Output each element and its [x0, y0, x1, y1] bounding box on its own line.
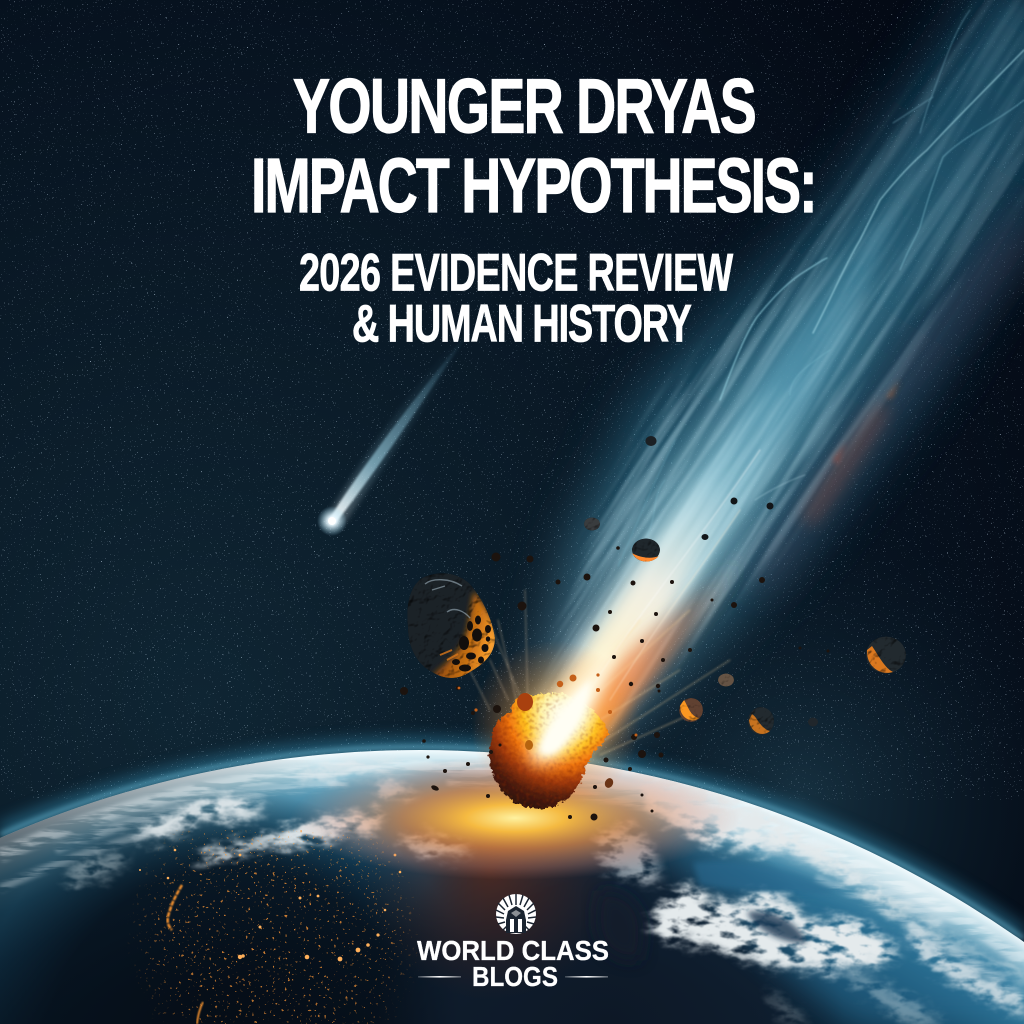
earth: atmosphere streaks — [0, 766, 1024, 999]
earth — [0, 745, 1024, 1024]
comet plasma trail — [501, 0, 1024, 766]
title line 1: YOUNGER DRYAS — [293, 64, 757, 150]
earth: right limb haze — [650, 797, 950, 919]
earth: city lights — [120, 830, 440, 1024]
earth: impact glow on surface — [290, 756, 740, 880]
logo wordmark line 2: BLOGS — [472, 961, 558, 992]
trail: red ember edge — [745, 205, 1024, 590]
icon: shell emblem — [496, 894, 536, 934]
radial spark rays — [462, 590, 730, 755]
debris particles — [400, 546, 830, 820]
impact halo — [470, 640, 640, 810]
earth: ocean tint — [680, 850, 1024, 1024]
small comet — [317, 320, 475, 536]
medium asteroids — [584, 436, 906, 735]
title — [251, 64, 818, 353]
subtitle line 2: & HUMAN HISTORY — [352, 294, 692, 353]
logo wordmark line 1: WORLD CLASS — [417, 935, 609, 966]
large asteroid — [407, 573, 498, 683]
title line 2: IMPACT HYPOTHESIS: — [251, 143, 818, 229]
subtitle line 1: 2026 EVIDENCE REVIEW — [299, 243, 734, 302]
impactor fireball — [485, 645, 615, 815]
earth: dark ocean gaps — [642, 862, 832, 948]
logo: World Class Blogs — [417, 894, 609, 992]
background: star field — [0, 0, 1024, 800]
earth: cloud bands — [70, 761, 1024, 1024]
